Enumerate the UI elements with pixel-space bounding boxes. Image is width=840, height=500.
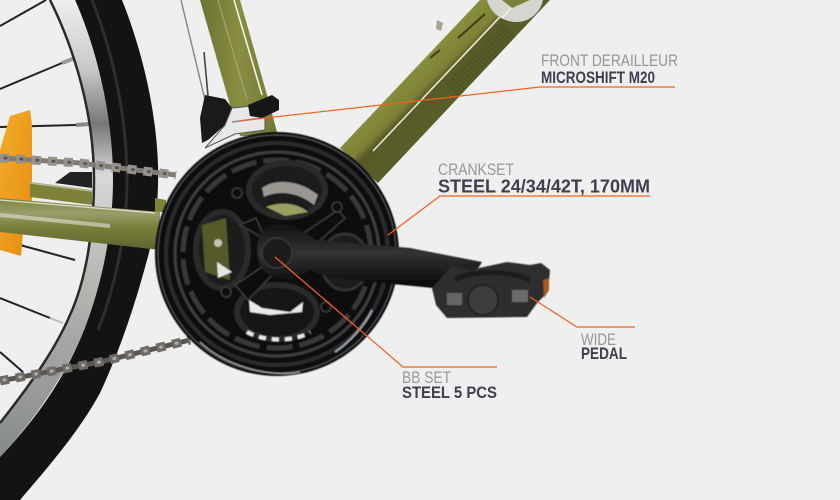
label: crankset [438, 160, 650, 196]
seat tube [200, 0, 278, 136]
cable [181, 0, 205, 100]
chain guard [155, 132, 399, 376]
lower chain [0, 340, 190, 381]
crankset [155, 132, 482, 376]
upper chain [0, 158, 176, 175]
label: pedal [581, 330, 627, 363]
chainring window: left [196, 212, 248, 288]
label: front derailleur [541, 51, 678, 87]
reflector [0, 110, 32, 256]
tyre [0, 0, 158, 500]
leader line: crankset [388, 196, 650, 235]
chainring window: bottom [237, 285, 317, 340]
leader line: bb set [275, 257, 497, 367]
rear wheel [0, 0, 158, 500]
spider arms and bolts [221, 188, 345, 312]
label: front derailleur: FRONT DERAILLEUR [541, 51, 678, 70]
label: bb set [402, 368, 497, 402]
bottle bolt [436, 20, 443, 31]
logo badge [487, 0, 543, 22]
label: bb set: STEEL 5 PCS [402, 383, 497, 402]
label: pedal: PEDAL [581, 344, 627, 363]
front derailleur [200, 52, 279, 148]
label: crankset: CRANKSET [438, 160, 514, 179]
leader line: front derailleur [239, 87, 675, 121]
label: pedal: WIDE [581, 330, 616, 349]
label: crankset: STEEL 24/34/42T, 170MM [438, 176, 650, 196]
chainring window: top [249, 163, 325, 217]
tyre groove [92, 0, 127, 330]
chainring window: right [321, 234, 369, 290]
label: bb set: BB SET [402, 368, 451, 387]
leader line: pedal [530, 297, 635, 327]
label: front derailleur: MICROSHIFT M20 [541, 68, 655, 87]
spokes [0, 0, 90, 372]
pedal [432, 262, 550, 318]
crank bolt [262, 238, 292, 268]
chain stays [0, 172, 166, 250]
down tube [340, 0, 550, 183]
crank arm [257, 224, 482, 288]
rim [0, 0, 113, 457]
